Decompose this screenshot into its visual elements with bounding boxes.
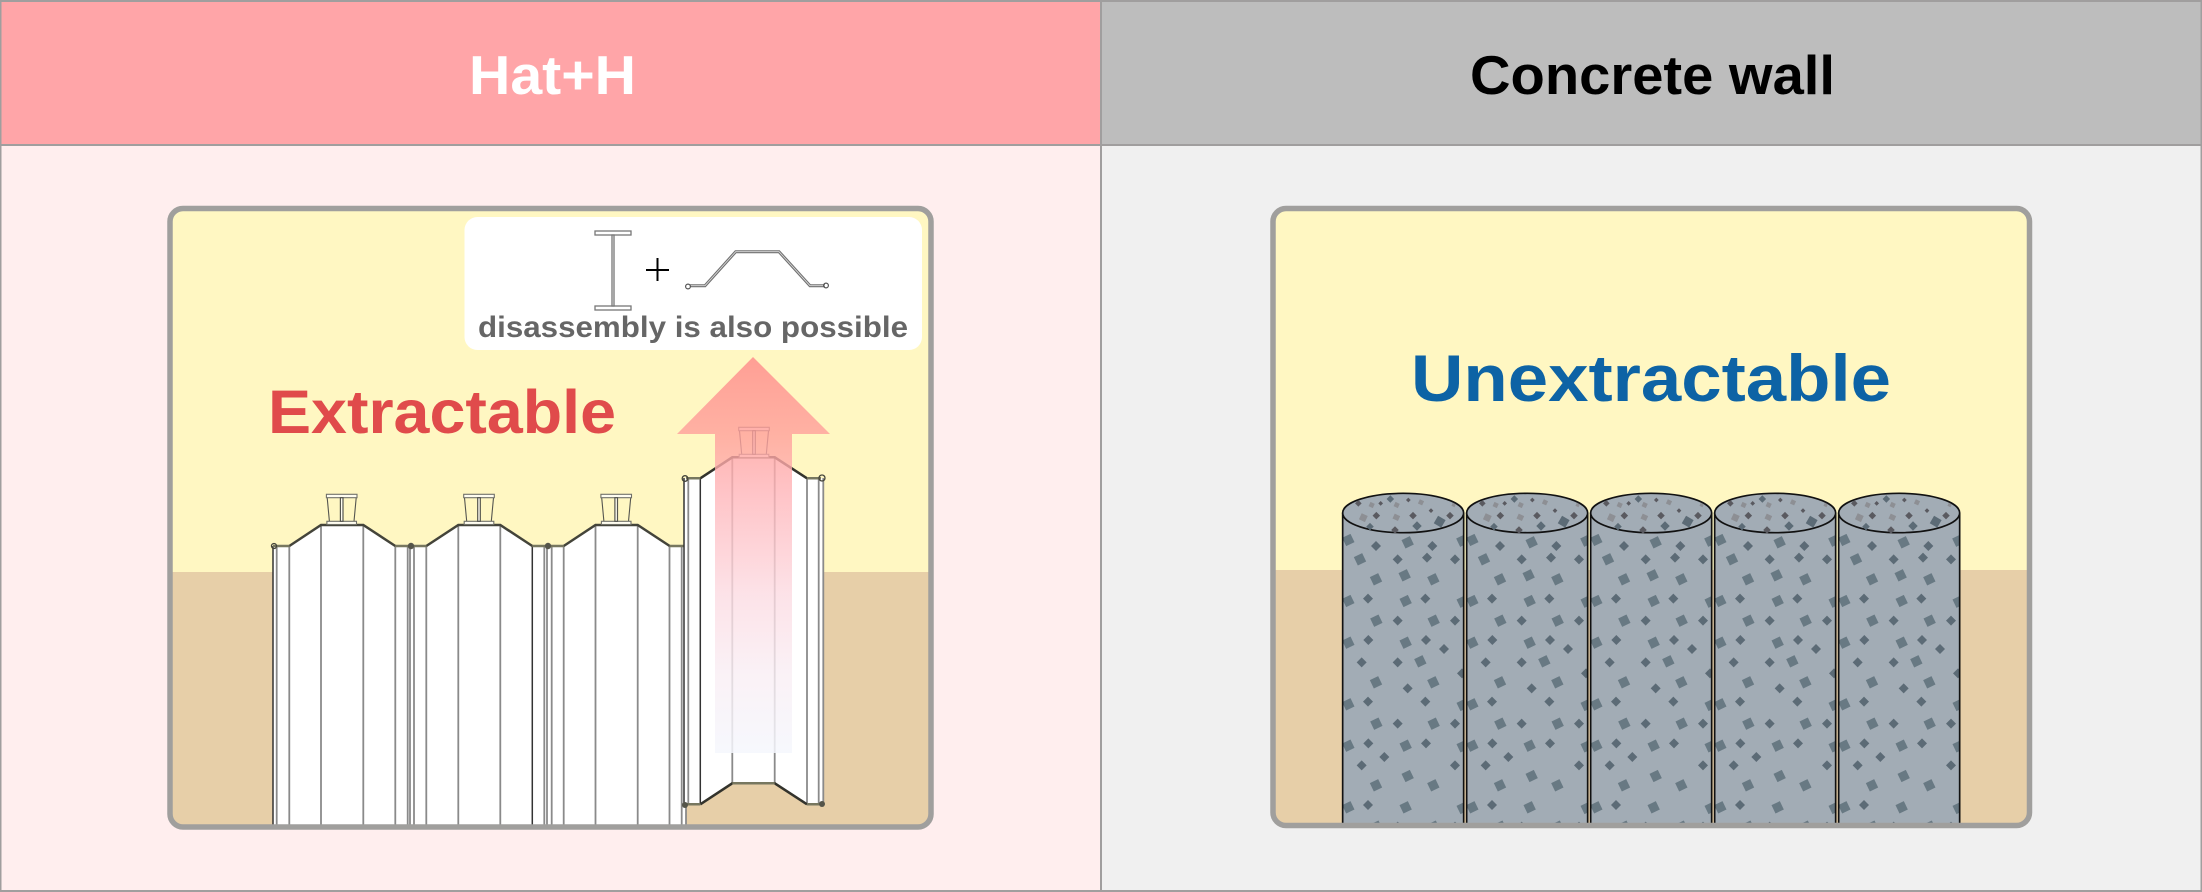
header: Concrete wall: [1101, 2, 2202, 144]
header: Hat+H: Hat+H: [469, 44, 636, 106]
sky: [170, 208, 931, 827]
panel: Concrete wall background: [1101, 146, 2202, 892]
concrete pile 2: [1466, 493, 1593, 833]
concrete pile 1: [1342, 493, 1469, 833]
sky: [1273, 208, 2030, 826]
panel: Concrete wall scene: [1273, 208, 2030, 833]
header: Hat+H: [0, 2, 1101, 144]
icon: hat sheet pile: [686, 252, 828, 289]
concrete pile 5: [1838, 493, 1965, 833]
arrow: extraction upward: [677, 357, 830, 753]
ground: [170, 572, 931, 827]
concrete pile 4: [1714, 493, 1841, 833]
header: Concrete wall: Concrete wall: [1470, 44, 1835, 106]
frame border: [170, 208, 931, 827]
callout text: disassembly is also possible: [478, 311, 908, 344]
heading: Unextractable: Unextractable: [1411, 341, 1891, 415]
frame border: [1273, 208, 2030, 826]
panel: Hat+H scene: [170, 208, 931, 828]
callout: disassembly: [464, 217, 922, 350]
ground: [1273, 570, 2030, 826]
extracted sheet pile: [682, 427, 825, 808]
icon: plus: [646, 258, 669, 281]
heading: Extractable: Extractable: [268, 378, 616, 446]
concrete pile 3: [1590, 493, 1717, 833]
panel: Hat+H background: [0, 146, 1101, 892]
sheet pile wall: driven piles: [272, 494, 686, 828]
icon: H beam: [595, 231, 631, 310]
